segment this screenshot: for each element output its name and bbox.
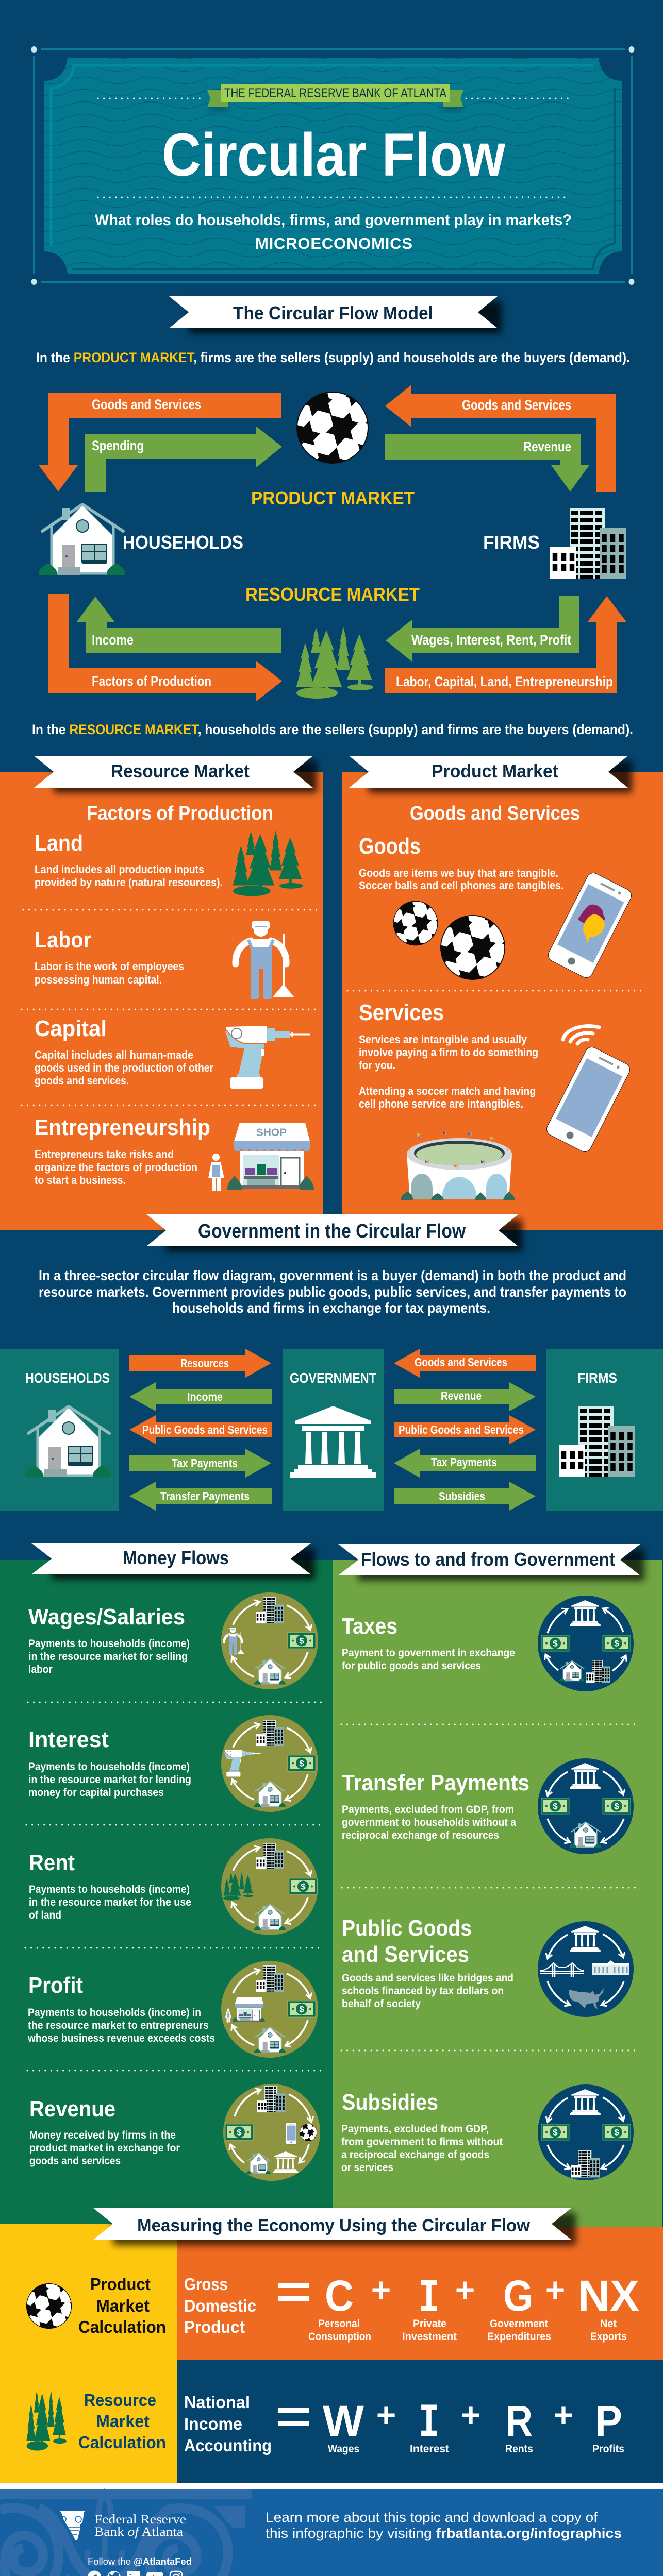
heading: subsidies: Subsidies bbox=[342, 2090, 438, 2115]
text: capital: goods used in the production of other bbox=[35, 1061, 213, 1074]
arrow: transfer payments: Transfer Payments bbox=[160, 1489, 250, 1503]
heading: rent: Rent bbox=[29, 1850, 75, 1875]
text: revenue: product market in exchange for bbox=[29, 2142, 180, 2154]
equation: national income formula bbox=[275, 2391, 624, 2455]
box: government: GOVERNMENT bbox=[290, 1370, 376, 1386]
icon: shop bbox=[208, 1123, 314, 1191]
equation: GDP formula: Investment bbox=[402, 2331, 457, 2343]
text: wages/salaries: Payments to households (income) bbox=[28, 1638, 190, 1650]
label: product market calculation bbox=[78, 2275, 166, 2336]
arrow: subsidies bbox=[394, 1482, 536, 1511]
label: national income accounting bbox=[184, 2393, 272, 2455]
equation: national income formula: + bbox=[554, 2396, 573, 2434]
heading: services: Services bbox=[359, 1000, 444, 1025]
arrow: labor, capital, land, entrepreneurship: Labor, Capital, Land, Entrepreneurship bbox=[396, 674, 613, 689]
text: goods: Goods are items we buy that are tangible. bbox=[359, 867, 558, 879]
label: households: HOUSEHOLDS bbox=[123, 532, 243, 553]
arrow: wages, interest, rent, profit bbox=[386, 596, 579, 662]
text: taxes: Payment to government in exchange bbox=[342, 1647, 515, 1659]
arrow: goods and services from firms: Goods and Services bbox=[415, 1355, 507, 1369]
equation: GDP formula: + bbox=[545, 2270, 565, 2309]
heading: labor: Labor bbox=[35, 927, 91, 953]
heading: public goods and services: Public Goods bbox=[342, 1916, 472, 1941]
icon: shop: SHOP bbox=[256, 1127, 287, 1139]
arrow: goods and services to households bbox=[39, 393, 281, 492]
icon: soccer ball bbox=[286, 376, 377, 468]
heading: goods: Goods bbox=[359, 834, 421, 859]
chart: circular flow diagram bbox=[39, 376, 626, 702]
text: taxes: for public goods and services bbox=[342, 1660, 481, 1672]
equation: GDP formula: = bbox=[275, 2265, 311, 2318]
text: entrepreneurship bbox=[35, 1148, 197, 1187]
footer bbox=[0, 2483, 663, 2576]
arrow: tax payments from firms bbox=[394, 1449, 536, 1478]
text: subsidies: Payments, excluded from GDP, bbox=[341, 2123, 489, 2135]
text: wages/salaries: in the resource market for selling bbox=[28, 1651, 188, 1663]
label: product market: PRODUCT MARKET bbox=[251, 487, 415, 509]
text: profit: whose business revenue exceeds costs bbox=[27, 2032, 215, 2044]
arrow: revenue: Revenue bbox=[441, 1389, 482, 1402]
banner: flows to and from government bbox=[338, 1544, 644, 1581]
equation: national income formula: + bbox=[376, 2396, 396, 2434]
banner: flows to and from government: Flows to and from Government bbox=[361, 1549, 615, 1570]
arrow: tax payments from households bbox=[129, 1449, 271, 1478]
banner: The Circular Flow Model bbox=[169, 296, 502, 333]
equation: national income formula: P bbox=[595, 2397, 622, 2445]
text: capital bbox=[35, 1048, 213, 1087]
text: rent: Payments to households (income) bbox=[29, 1884, 190, 1895]
banner: government in the circular flow: Government in the Circular Flow bbox=[198, 1221, 466, 1242]
text: services: Services are intangible and usually bbox=[359, 1033, 527, 1046]
equation: GDP formula: NX bbox=[578, 2272, 639, 2320]
text: public goods and services: Goods and services like bridges and bbox=[342, 1972, 513, 1984]
label: national income accounting: Income bbox=[184, 2414, 242, 2433]
ribbon: The Federal Reserve Bank of Atlanta: THE FEDERAL RESERVE BANK OF ATLANTA bbox=[224, 86, 446, 100]
banner: government in the circular flow bbox=[146, 1214, 522, 1251]
text: transfer payments: government to households without a bbox=[342, 1817, 516, 1828]
equation: national income formula: Profits bbox=[592, 2443, 624, 2455]
text: subsidies: from government to firms without bbox=[341, 2136, 503, 2148]
arrow: income bbox=[76, 597, 281, 653]
equation: GDP formula bbox=[275, 2265, 639, 2343]
text: goods bbox=[359, 867, 563, 892]
text: government intro: households and firms in exchange for tax payments. bbox=[172, 1300, 490, 1316]
heading: public goods and services bbox=[342, 1916, 472, 1967]
heading: profit: Profit bbox=[28, 1973, 83, 1998]
text: wages/salaries bbox=[28, 1638, 190, 1675]
icon: soccer ball bbox=[20, 2274, 77, 2331]
arrow: revenue bbox=[385, 434, 589, 492]
equation: national income formula: I bbox=[419, 2396, 439, 2450]
label: resource market: RESOURCE MARKET bbox=[245, 584, 420, 605]
heading: revenue: Revenue bbox=[29, 2096, 115, 2122]
text: goods: Soccer balls and cell phones are tangibles. bbox=[359, 879, 563, 892]
arrow: revenue: Revenue bbox=[523, 439, 571, 454]
logo: Federal Reserve Bank of Atlanta: Bank of Atlanta bbox=[94, 2525, 183, 2539]
equation: national income formula: Wages bbox=[328, 2443, 359, 2455]
banner: money flows bbox=[31, 1543, 315, 1580]
text: learn more: Learn more about this topic and download a copy of bbox=[266, 2510, 598, 2525]
box: households: HOUSEHOLDS bbox=[25, 1370, 110, 1386]
footer background ornament bbox=[0, 2489, 252, 2576]
panel: flows to and from government bbox=[333, 1544, 662, 2227]
panel: money flows bbox=[0, 1543, 333, 2224]
diagram: taxes flow bbox=[538, 1596, 634, 1691]
chart: three-sector flow diagram bbox=[0, 1349, 663, 1511]
banner: money flows: Money Flows bbox=[123, 1547, 229, 1568]
diagram: public goods flow bbox=[538, 1921, 634, 2017]
arrow: goods and services to households: Goods and Services bbox=[92, 397, 201, 412]
icon: worker bbox=[236, 921, 294, 999]
heading: public goods and services: and Services bbox=[342, 1942, 469, 1967]
equation: national income formula: W bbox=[323, 2397, 364, 2445]
text: follow the @AtlantaFed: Follow the @AtlantaFed bbox=[88, 2556, 192, 2567]
text: profit: the resource market to entrepreneurs bbox=[28, 2020, 209, 2031]
text: entrepreneurship: Entrepreneurs take risks and bbox=[35, 1148, 174, 1161]
panel: product market bbox=[342, 756, 663, 1230]
text: labor: possessing human capital. bbox=[35, 973, 162, 986]
equation: national income formula: Interest bbox=[410, 2443, 449, 2455]
arrow: spending: Spending bbox=[92, 438, 144, 453]
text: services: Attending a soccer match and having bbox=[359, 1084, 536, 1097]
text: public goods and services: behalf of society bbox=[342, 1998, 421, 2010]
label: gross domestic product: Gross bbox=[184, 2275, 228, 2294]
arrow: subsidies: Subsidies bbox=[439, 1489, 485, 1503]
heading: wages/salaries: Wages/Salaries bbox=[28, 1604, 185, 1630]
arrow: factors of production: Factors of Production bbox=[92, 673, 211, 689]
heading: goods and services: Goods and Services bbox=[410, 803, 580, 824]
text: learn more bbox=[266, 2510, 622, 2541]
label: resource market calculation bbox=[78, 2391, 166, 2452]
heading: transfer payments: Transfer Payments bbox=[342, 1770, 529, 1795]
icon: trees bbox=[26, 2390, 67, 2451]
icon: phone with chat bubbles bbox=[546, 871, 634, 980]
arrow: goods and services from firms bbox=[385, 385, 616, 492]
text: capital: goods and services. bbox=[35, 1074, 129, 1087]
heading: land: Land bbox=[35, 831, 83, 856]
icon: stadium bbox=[401, 1131, 515, 1200]
label: resource market calculation: Resource bbox=[84, 2391, 156, 2410]
equation: GDP formula: Consumption bbox=[308, 2331, 371, 2343]
banner: The Circular Flow Model: The Circular Flow Model bbox=[233, 302, 433, 324]
text: transfer payments bbox=[342, 1804, 516, 1841]
subtitle question: What roles do households, firms, and government play in markets? bbox=[95, 212, 572, 229]
text: land bbox=[35, 863, 223, 889]
equation: GDP formula: I bbox=[419, 2272, 439, 2326]
heading: entrepreneurship: Entrepreneurship bbox=[35, 1115, 210, 1140]
label: resource market calculation: Calculation bbox=[78, 2433, 166, 2452]
text: government intro bbox=[39, 1267, 626, 1316]
equation: GDP formula: Expenditures bbox=[487, 2331, 551, 2343]
equation: GDP formula: Net bbox=[600, 2318, 617, 2330]
label: gross domestic product: Domestic bbox=[184, 2296, 256, 2315]
label: product market calculation: Market bbox=[96, 2296, 150, 2315]
equation: GDP formula: + bbox=[371, 2270, 391, 2309]
arrow: wages, interest, rent, profit: Wages, Interest, Rent, Profit bbox=[411, 632, 571, 648]
text: capital: Capital includes all human-made bbox=[35, 1048, 193, 1061]
icon: trees bbox=[296, 626, 373, 699]
icon: house bbox=[39, 504, 125, 575]
text: entrepreneurship: to start a business. bbox=[35, 1174, 126, 1187]
ribbon: The Federal Reserve Bank of Atlanta bbox=[207, 84, 463, 110]
equation: GDP formula: Exports bbox=[590, 2331, 627, 2343]
text: labor: Labor is the work of employees bbox=[35, 960, 184, 973]
arrow: public goods and services to firms: Public Goods and Services bbox=[399, 1423, 524, 1436]
icon: firm buildings bbox=[550, 508, 626, 579]
arrow: income: Income bbox=[92, 632, 134, 648]
text: revenue: goods and services bbox=[29, 2155, 121, 2167]
icon: large soccer ball bbox=[430, 901, 513, 984]
label: firms: FIRMS bbox=[483, 532, 540, 553]
icon: trees bbox=[233, 831, 303, 896]
heading: interest: Interest bbox=[28, 1727, 109, 1752]
arrow: public goods and services to firms bbox=[394, 1415, 536, 1444]
diagram: profit flow bbox=[221, 1961, 318, 2058]
text: public goods and services: schools financed by tax dollars on bbox=[342, 1985, 504, 1997]
text: learn more: this infographic by visiting frbatlanta.org/infographics bbox=[266, 2526, 622, 2541]
icon: small soccer ball bbox=[387, 891, 443, 948]
icon: drill bbox=[225, 1026, 310, 1089]
text: subsidies: a reciprocal exchange of goods bbox=[341, 2149, 489, 2161]
box: households bbox=[0, 1349, 119, 1511]
text: interest: money for capital purchases bbox=[28, 1787, 164, 1799]
arrow: goods and services from firms bbox=[394, 1349, 536, 1378]
label: resource market calculation: Market bbox=[96, 2412, 150, 2431]
heading: factors of production: Factors of Production bbox=[87, 803, 273, 824]
equation: national income formula: Rents bbox=[505, 2443, 533, 2455]
equation: GDP formula: Government bbox=[490, 2318, 548, 2330]
label: product market calculation: Calculation bbox=[78, 2317, 166, 2336]
equation: GDP formula: + bbox=[455, 2270, 475, 2309]
text: interest: in the resource market for lending bbox=[28, 1774, 191, 1786]
text: taxes bbox=[342, 1647, 515, 1672]
arrow: resources: Resources bbox=[180, 1357, 229, 1370]
icon: wifi signal bbox=[563, 1026, 599, 1044]
label: gross domestic product: Product bbox=[184, 2317, 245, 2336]
label: national income accounting: Accounting bbox=[184, 2436, 272, 2455]
banner: product market bbox=[349, 756, 632, 793]
equation: GDP formula: Private bbox=[413, 2318, 446, 2330]
text: services: for you. bbox=[359, 1059, 395, 1072]
text: transfer payments: reciprocal exchange of resources bbox=[342, 1829, 499, 1841]
text: labor bbox=[35, 960, 184, 986]
text: land: provided by nature (natural resources). bbox=[35, 876, 223, 889]
box: government bbox=[283, 1349, 384, 1511]
panel: measuring the economy bbox=[0, 2208, 663, 2483]
text: services: involve paying a firm to do something bbox=[359, 1046, 538, 1059]
text: profit bbox=[27, 2007, 215, 2044]
icons: social media bbox=[88, 2571, 182, 2576]
text: interest: Payments to households (income) bbox=[28, 1761, 190, 1773]
title: Circular Flow bbox=[162, 121, 506, 189]
text: services: cell phone service are intangibles. bbox=[359, 1097, 523, 1110]
text: subsidies: or services bbox=[341, 2162, 393, 2174]
diagram: revenue flow bbox=[223, 2084, 320, 2181]
arrow: labor, capital, land, entrepreneurship bbox=[385, 596, 626, 693]
text: rent: in the resource market for the use bbox=[29, 1896, 191, 1908]
text: transfer payments: Payments, excluded from GDP, from bbox=[342, 1804, 514, 1816]
text: rent: of land bbox=[29, 1909, 61, 1921]
banner: measuring the economy bbox=[93, 2208, 576, 2245]
box: firms bbox=[546, 1349, 663, 1511]
icon: phone bbox=[544, 1045, 632, 1154]
text: land: Land includes all production inputs bbox=[35, 863, 204, 876]
resource market intro text: In the RESOURCE MARKET, households are the sellers (supply) and firms are the buyers (demand). bbox=[32, 722, 633, 737]
text: wages/salaries: labor bbox=[28, 1664, 53, 1675]
heading: taxes: Taxes bbox=[342, 1614, 397, 1639]
arrow: income: Income bbox=[187, 1390, 223, 1403]
product market intro text: In the PRODUCT MARKET, firms are the sellers (supply) and households are the buyers (demand). bbox=[36, 350, 630, 365]
arrow: revenue bbox=[394, 1382, 536, 1411]
equation: national income formula: + bbox=[461, 2396, 480, 2434]
text: entrepreneurship: organize the factors of production bbox=[35, 1161, 197, 1174]
banner: resource market: Resource Market bbox=[111, 760, 250, 782]
arrow: public goods and services to households bbox=[129, 1415, 272, 1444]
banner: measuring the economy: Measuring the Economy Using the Circular Flow bbox=[137, 2216, 531, 2235]
arrow: resources bbox=[129, 1349, 271, 1378]
equation: national income formula: R bbox=[506, 2397, 533, 2445]
logo: Federal Reserve Bank of Atlanta: Federal Reserve bbox=[94, 2513, 186, 2527]
arrow: tax payments from households: Tax Payments bbox=[172, 1456, 238, 1470]
box: firms: FIRMS bbox=[577, 1370, 617, 1386]
label: product market calculation: Product bbox=[90, 2275, 151, 2294]
arrow: factors of production bbox=[48, 594, 282, 702]
logo: Federal Reserve Bank of Atlanta bbox=[60, 2511, 186, 2540]
banner: resource market bbox=[34, 756, 317, 793]
label: gross domestic product bbox=[184, 2275, 256, 2336]
text: services bbox=[359, 1033, 538, 1110]
diagram: wages flow bbox=[221, 1592, 318, 1689]
text: revenue bbox=[29, 2129, 180, 2167]
subtitle topic: MICROECONOMICS bbox=[255, 234, 412, 252]
arrow: transfer payments bbox=[129, 1482, 272, 1511]
panel: header plaque bbox=[31, 46, 634, 285]
arrow: tax payments from firms: Tax Payments bbox=[431, 1455, 497, 1469]
text: revenue: Money received by firms in the bbox=[29, 2129, 176, 2141]
text: subsidies bbox=[341, 2123, 503, 2174]
label: national income accounting: National bbox=[184, 2393, 250, 2412]
equation: GDP formula: Personal bbox=[318, 2318, 360, 2330]
diagram: rent flow bbox=[221, 1838, 318, 1935]
banner: product market: Product Market bbox=[432, 760, 558, 782]
text: rent bbox=[29, 1884, 191, 1921]
equation: national income formula: = bbox=[275, 2391, 311, 2443]
panel: resource market bbox=[0, 756, 323, 1230]
arrow: spending bbox=[85, 426, 282, 492]
diagram: transfer payments flow bbox=[538, 1758, 634, 1854]
diagram: interest flow bbox=[221, 1715, 318, 1812]
text: profit: Payments to households (income) in bbox=[28, 2007, 201, 2019]
heading: capital: Capital bbox=[35, 1016, 107, 1041]
equation: GDP formula: C bbox=[325, 2272, 354, 2320]
arrow: goods and services from firms: Goods and Services bbox=[462, 397, 571, 413]
text: public goods and services bbox=[342, 1972, 513, 2010]
equation: GDP formula: G bbox=[503, 2272, 533, 2320]
diagram: subsidies flow bbox=[538, 2084, 634, 2180]
arrow: income bbox=[129, 1382, 272, 1411]
text: interest bbox=[28, 1761, 191, 1799]
arrow: public goods and services to households: Public Goods and Services bbox=[142, 1423, 268, 1436]
